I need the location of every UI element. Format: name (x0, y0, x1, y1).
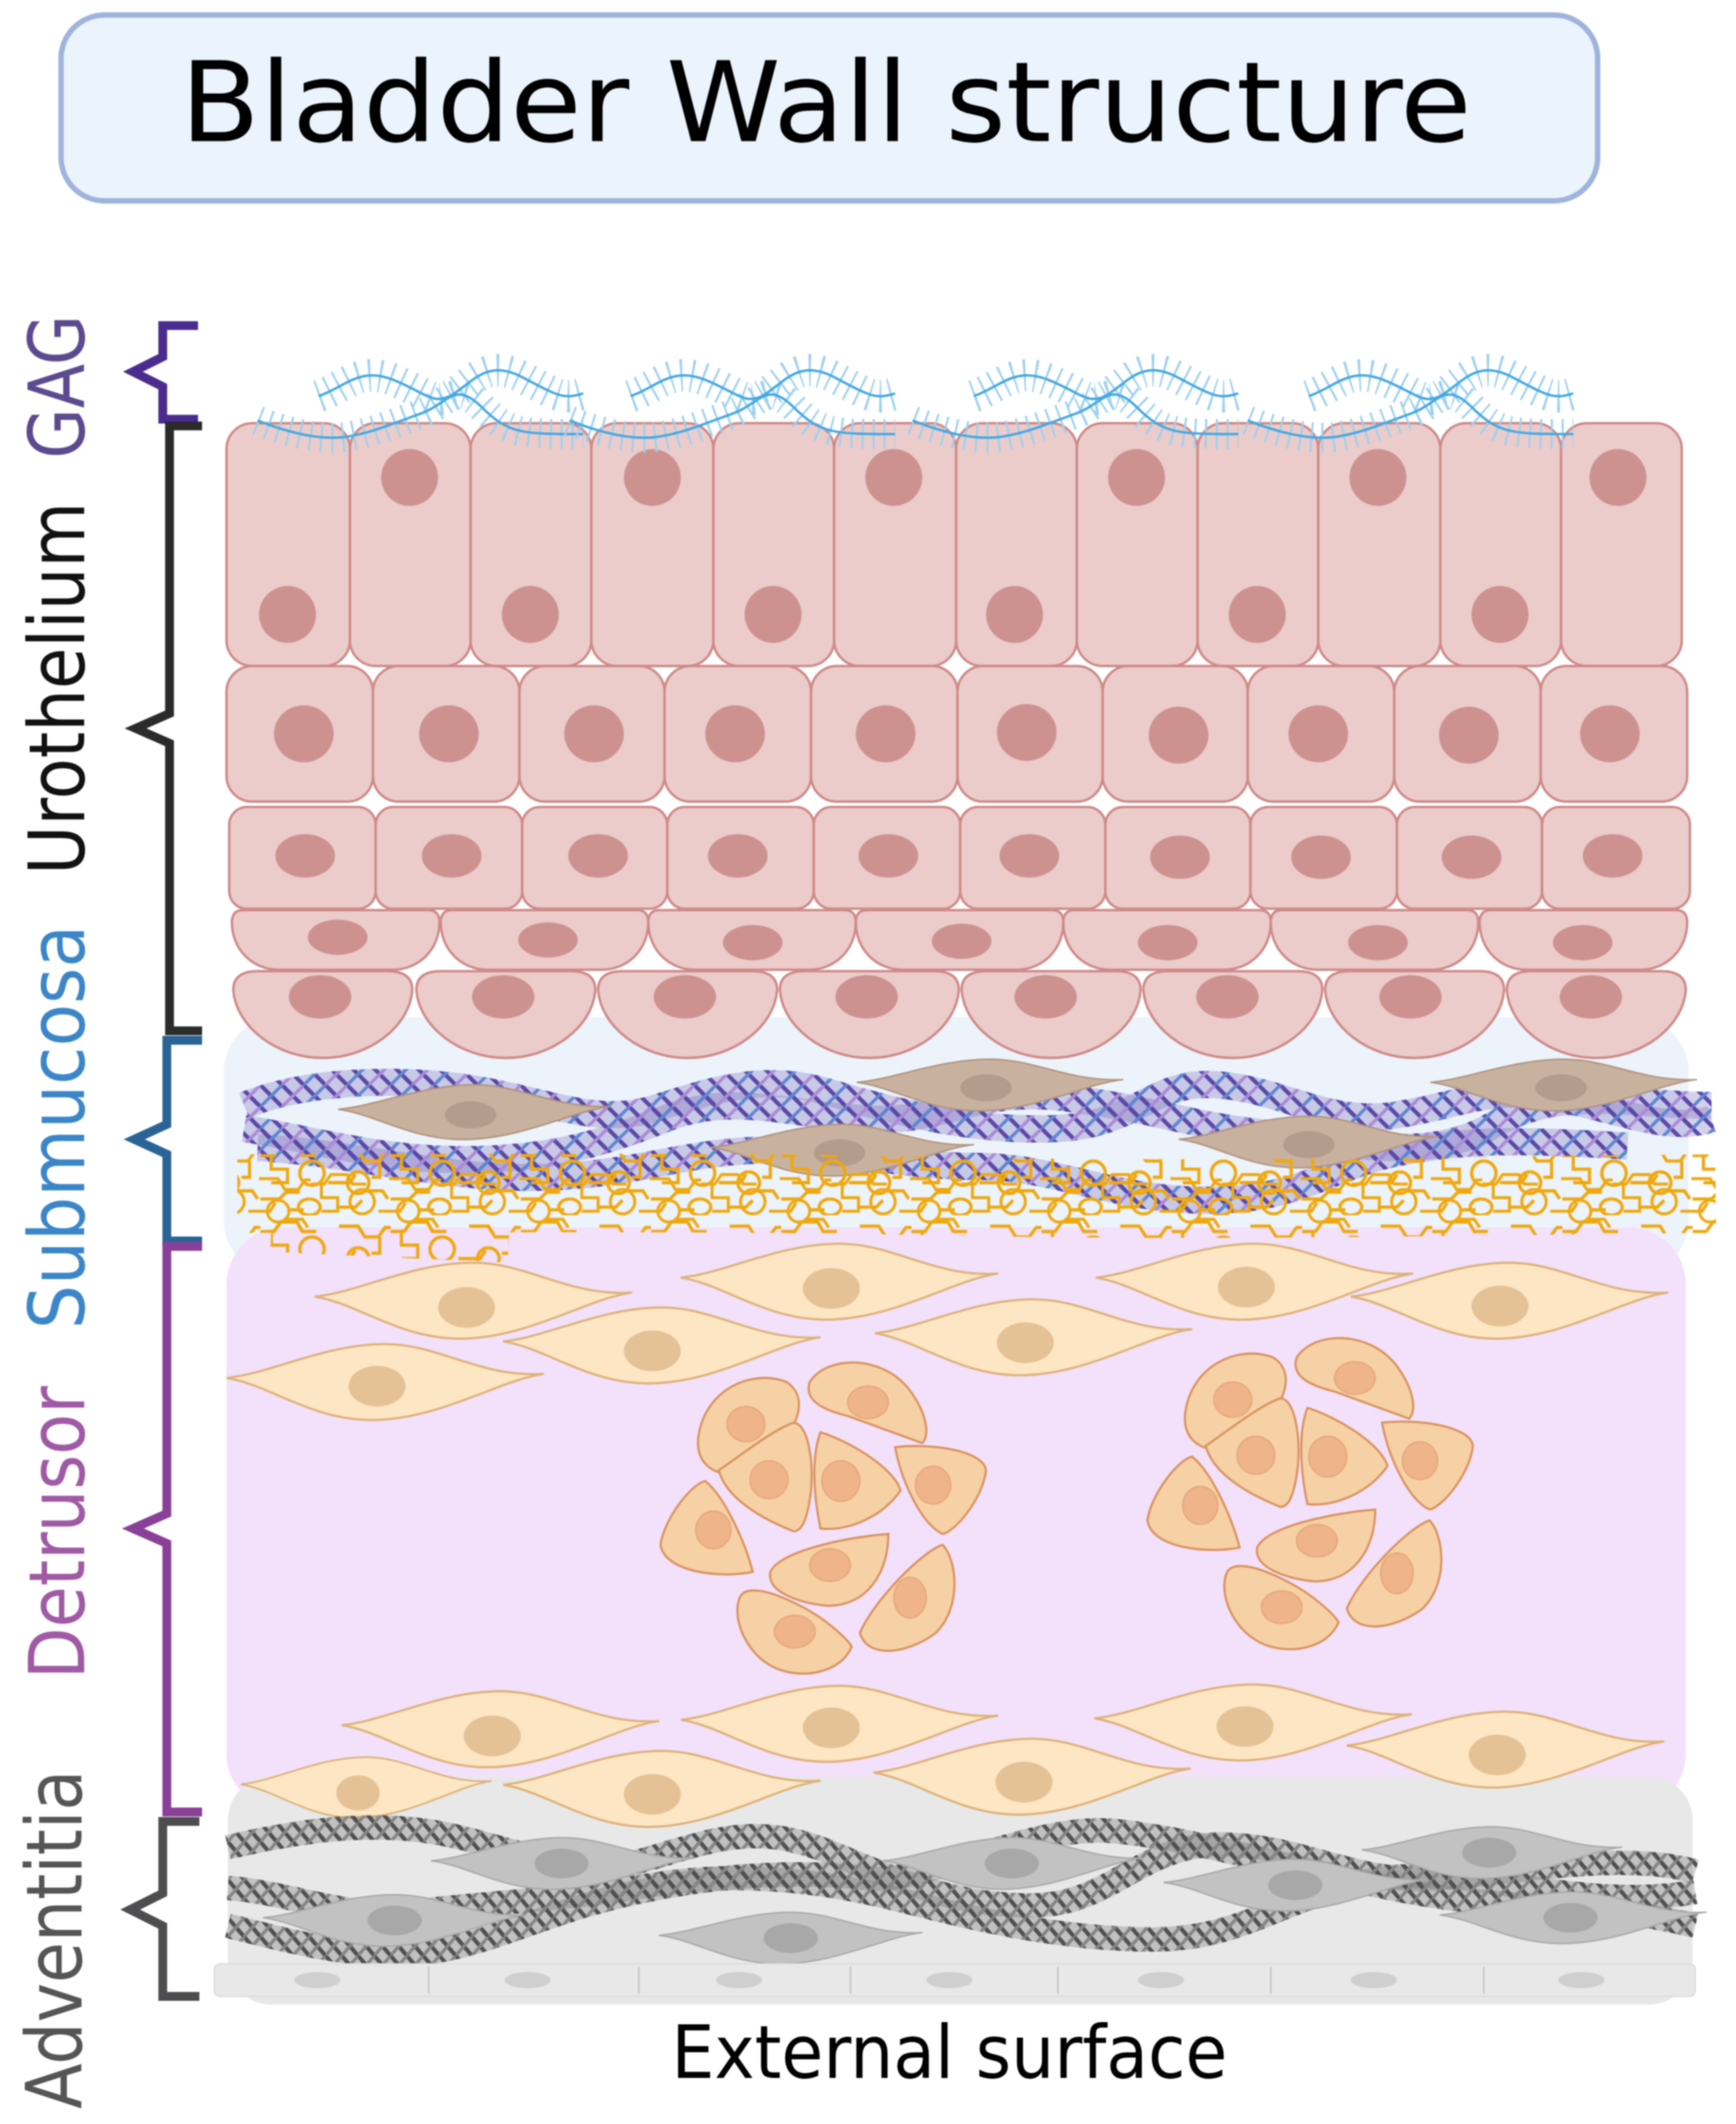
title box: Bladder Wall structure (181, 38, 1472, 167)
panel: submucosa background (224, 1017, 1688, 1275)
bracket: Urothelium (136, 426, 202, 1031)
detrusor longitudinal muscle cells, bottom (241, 1684, 1664, 1827)
bracket: Adventitia (130, 1822, 199, 1996)
side label: Submucosa: Submucosa (12, 925, 103, 1329)
detrusor longitudinal muscle cells, top (227, 1244, 1668, 1420)
detrusor muscle cross-section cluster left (660, 1363, 986, 1674)
side label: Urothelium: Urothelium (12, 502, 103, 875)
detrusor muscle cross-section cluster right (1148, 1338, 1473, 1649)
panel: detrusor background (227, 1227, 1685, 1810)
basal cell row (233, 971, 1685, 1058)
flattened cell row (232, 910, 1687, 969)
bracket: GAG (133, 325, 198, 419)
adventitia collagen braids (228, 1827, 1695, 1955)
mesothelium cell row (214, 1964, 1695, 1996)
umbrella cell row (227, 424, 1682, 666)
urothelium cell layers (227, 424, 1690, 1058)
bracket: Submucosa (135, 1040, 202, 1241)
caption: External surface: External surface (672, 2011, 1227, 2096)
GAG layer fibres (258, 370, 1573, 438)
adventitia fibroblasts (263, 1827, 1707, 1964)
submucosa elastin fibres (237, 1193, 1716, 1242)
intermediate cell row 2 (230, 807, 1690, 909)
panel: adventitia background (228, 1777, 1693, 2004)
side label: Adventitia: Adventitia (10, 1770, 100, 2109)
intermediate cell row 1 (227, 666, 1687, 802)
submucosa fibroblasts (339, 1059, 1697, 1176)
side label: GAG: GAG (12, 315, 103, 458)
bracket: Detrusor (133, 1247, 202, 1812)
submucosa collagen braids (244, 1082, 1711, 1201)
title box (61, 15, 1598, 201)
side label: Detrusor: Detrusor (12, 1386, 103, 1679)
